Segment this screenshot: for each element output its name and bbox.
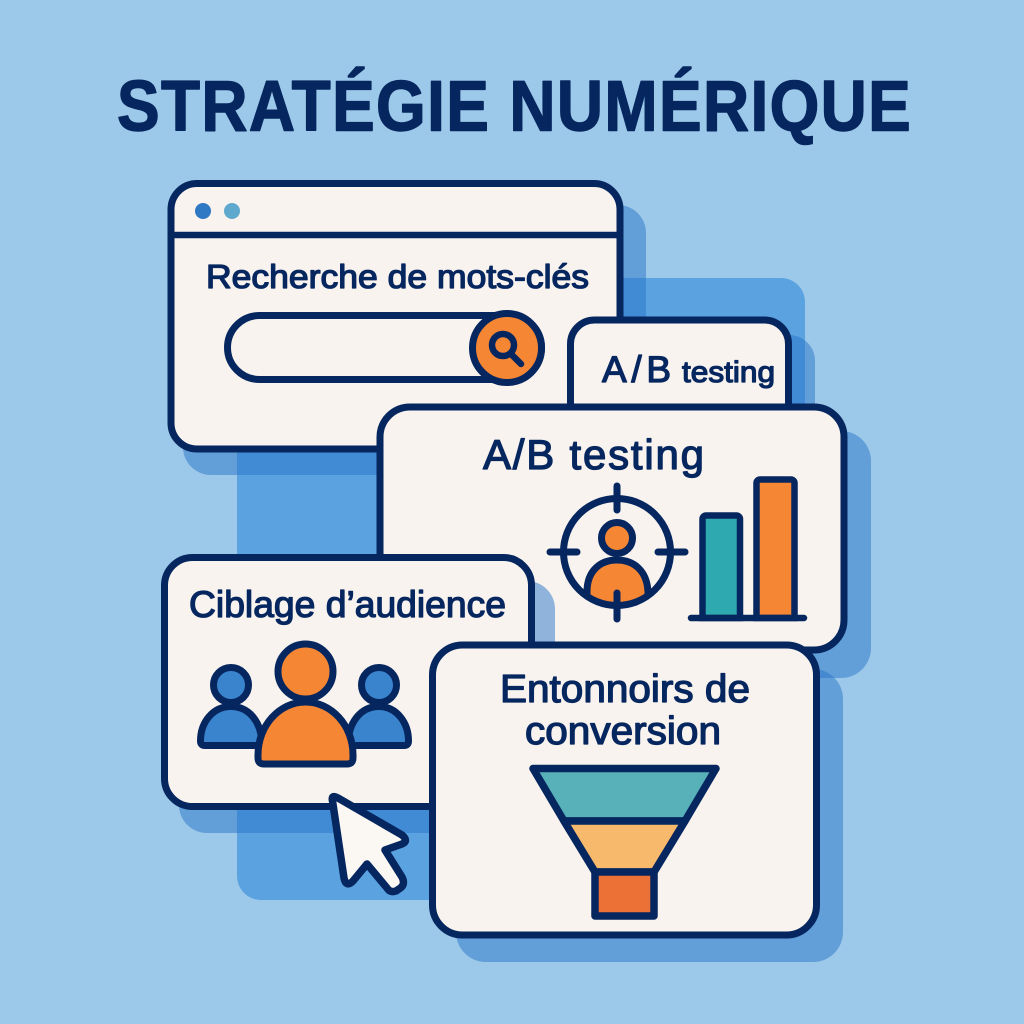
panel: audience targeting xyxy=(164,558,555,833)
heading: A/B testing: A/B testing xyxy=(483,431,704,478)
title: STRATÉGIE NUMÉRIQUE xyxy=(117,67,911,146)
panel: conversion funnels xyxy=(432,645,843,962)
heading: small testing: testing xyxy=(682,356,775,389)
panel: small A/B testing xyxy=(570,320,815,445)
panel: main A/B testing xyxy=(380,407,871,678)
heading: audience targeting: Ciblage d’audience xyxy=(189,584,506,625)
icon: people group xyxy=(200,644,408,764)
icon: funnel xyxy=(533,768,716,916)
heading: conversion funnels xyxy=(500,668,750,753)
heading: conversion funnels: Entonnoirs de xyxy=(500,668,750,711)
heading: keyword research: Recherche de mots-clés xyxy=(206,258,589,295)
heading: conversion funnels: conversion xyxy=(525,710,721,753)
heading: small A/B: A/B xyxy=(602,349,671,390)
search bar xyxy=(228,314,542,382)
background blue panel xyxy=(237,278,805,900)
bar chart xyxy=(691,480,804,618)
icon: audience target xyxy=(550,486,685,619)
panel: keyword research window xyxy=(171,184,646,475)
icon: mouse cursor xyxy=(332,797,406,892)
